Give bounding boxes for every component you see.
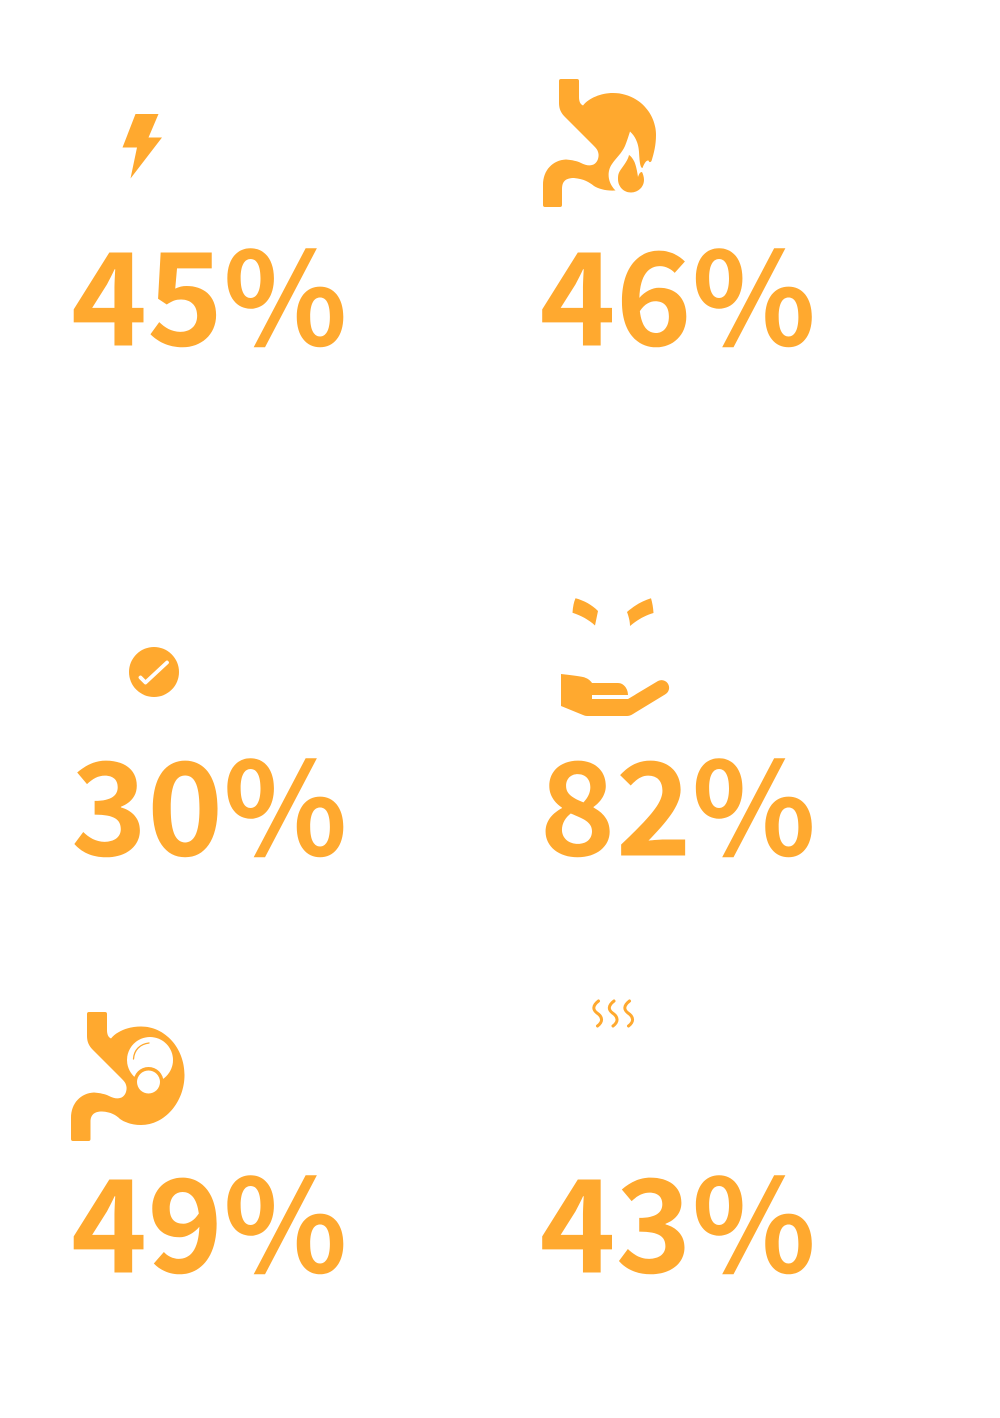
icon: lightning bolt (122, 114, 162, 178)
panel: 30% check (71, 647, 347, 894)
panel: 49% stomach with ball (71, 1012, 347, 1310)
panel: 46% heartburn (540, 79, 816, 384)
stat: 30%: 30% (71, 706, 347, 894)
stat: 82%: 82% (540, 706, 816, 894)
panel: 82% hand and eyebrows (540, 598, 816, 894)
panel: 43% heat waves (540, 1001, 816, 1310)
stat: 43%: 43% (540, 1124, 816, 1310)
icon: three wavy lines (594, 1001, 633, 1026)
icon: stomach with ulcer circles (71, 1012, 184, 1141)
icon: eyebrows over open hand (561, 598, 669, 716)
panel: 45% lightning (71, 114, 347, 384)
stat: 45%: 45% (71, 196, 347, 384)
icon: stomach with flame (543, 79, 656, 207)
icon: check circle (129, 647, 179, 697)
stat: 46%: 46% (540, 196, 816, 384)
stat: 49%: 49% (71, 1124, 347, 1310)
